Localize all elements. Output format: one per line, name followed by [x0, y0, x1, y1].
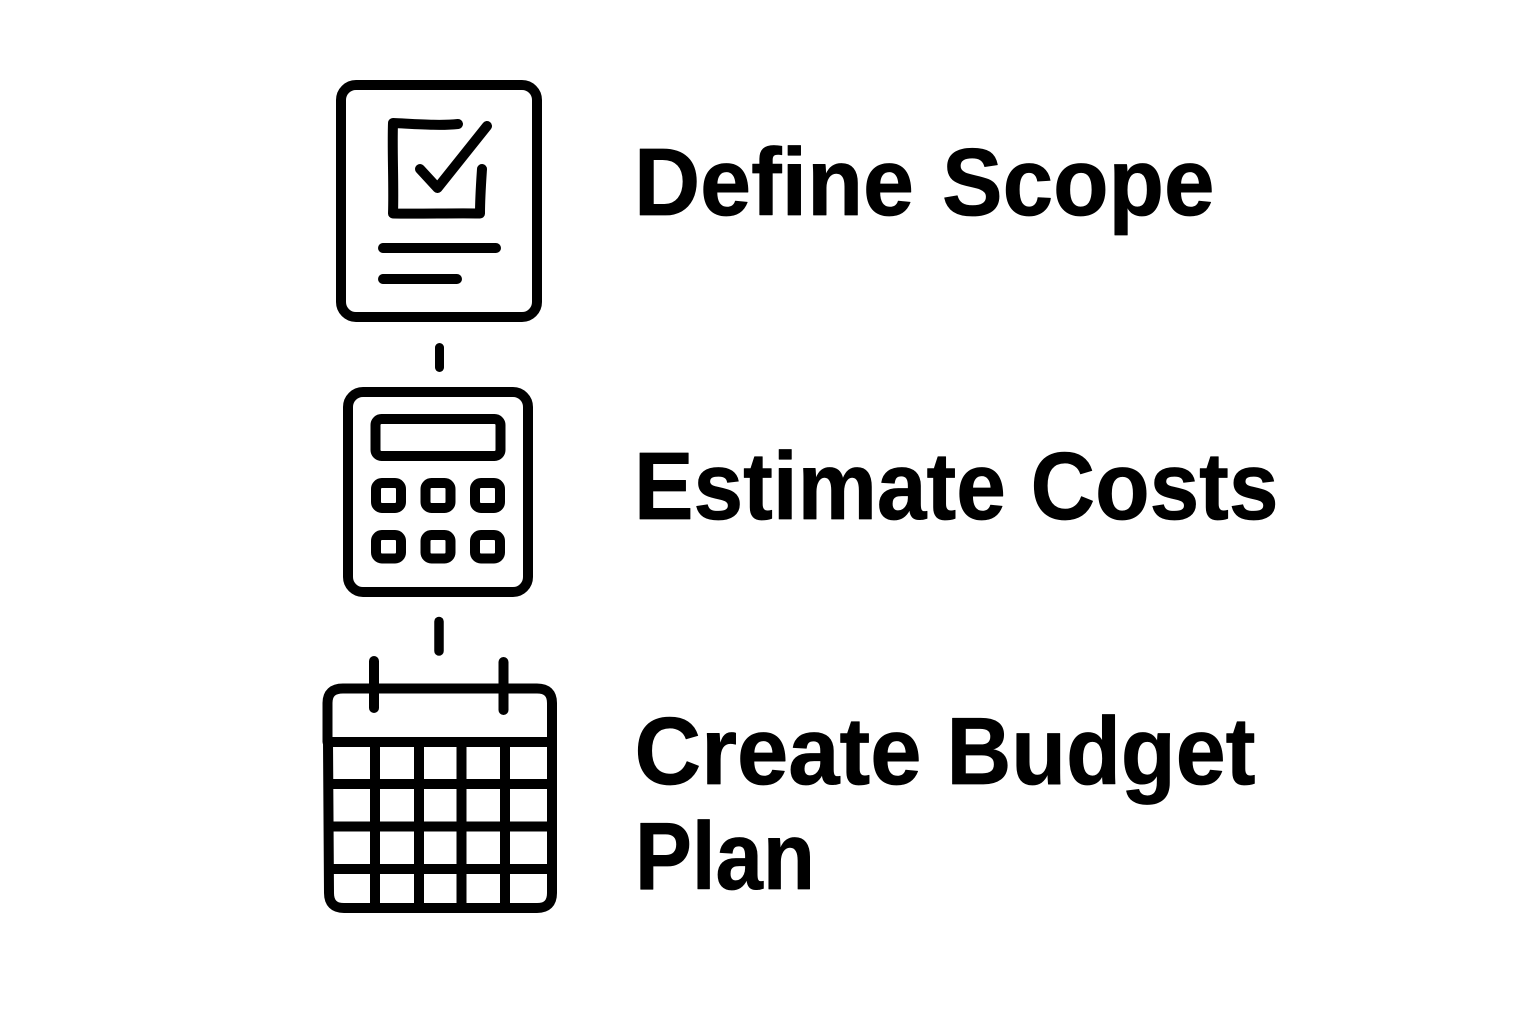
heading: Define Scope: Scope: [942, 129, 1214, 236]
heading: Create Budget Plan: Create: [634, 698, 922, 805]
connector: scope to costs: [435, 348, 444, 368]
heading: Create Budget Plan: [634, 698, 1256, 910]
heading: Estimate Costs: Estimate Costs: [634, 433, 1278, 540]
connector: costs to budget: [434, 622, 444, 651]
heading: Define Scope: [634, 129, 1214, 236]
heading: Create Budget Plan: Plan: [635, 803, 815, 910]
icon: calendar: [328, 661, 552, 908]
heading: Define Scope: Define: [634, 129, 914, 236]
heading: Create Budget Plan: Budget: [946, 698, 1256, 805]
icon: calculator: [348, 392, 528, 592]
icon: checklist document: [341, 85, 537, 317]
